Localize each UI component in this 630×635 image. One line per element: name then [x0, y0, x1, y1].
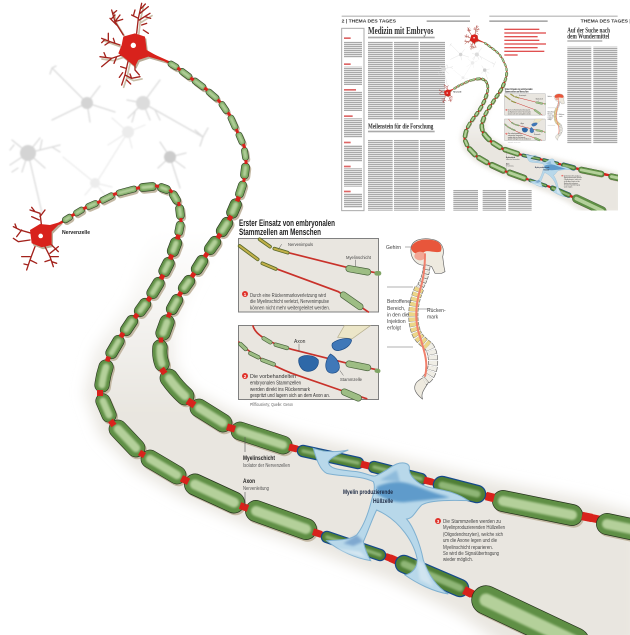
thumbnail left page: Meilenstein für die Forschung: [368, 121, 433, 130]
neuron: lower red cell: [13, 207, 63, 270]
spine and skull illustration: mark: [427, 314, 439, 320]
spine labels: Gehirn: [386, 245, 401, 251]
myelin-producing glial cell: [313, 448, 468, 594]
spine and skull illustration: Bereich,: [387, 306, 405, 312]
badge 3: 3: [437, 519, 440, 524]
graphic title: Stammzellen am Menschen: [239, 226, 321, 237]
skull: [411, 239, 445, 273]
lower axon: [52, 186, 480, 597]
shaded band behind axons: [85, 185, 630, 635]
label: Myelin producing cell: [343, 489, 393, 505]
spine and skull illustration: Betroffener: [387, 299, 412, 305]
label: Axon: [243, 479, 269, 506]
graphic title: [239, 217, 335, 237]
panel 1 labels: Nervenimpuls: [288, 242, 314, 248]
label: Axon: Axon: [243, 479, 255, 485]
label: Axon: Nervenleitung: [243, 486, 269, 492]
label: Myelin producing cell: Myelin produzierende: [343, 489, 393, 496]
panel 2 text: werden direkt ins Rückenmark: [250, 387, 310, 393]
thumbnail right page text: dem Wundermittel: [567, 31, 609, 40]
step 3 text: Myelinschicht reparieren.: [443, 545, 493, 551]
panel 1 text: [242, 291, 330, 312]
panel 2 axons, cells and syringe: [239, 326, 378, 399]
step 3 text: So wird die Signalübertragung: [443, 551, 499, 557]
thumbnail left page: [342, 16, 630, 211]
thumbnail left page: 2 | THEMA DES TAGES: [342, 19, 397, 25]
label: Nervenzelle: Nervenzelle: [62, 230, 90, 236]
panel 1 text: 1: [244, 292, 247, 297]
step 3 text: um die Axone legen und die: [443, 538, 497, 544]
panel 2 text: [242, 373, 330, 399]
panel 1 text: können nicht mehr weitergeleitet werden.: [250, 306, 330, 312]
panel 2: injection: [238, 326, 378, 400]
panel 2 text: 2: [244, 374, 247, 379]
panel 2 labels: Axon: [294, 339, 306, 345]
thumbnail right page text: [504, 25, 617, 143]
thumbnail left page: Medizin mit Embryos: [368, 26, 433, 37]
panel 2 text: gespritzt und lagern sich an dem Axon an.: [250, 393, 330, 399]
panel 1: injury: [238, 238, 379, 312]
spine and skull illustration: [386, 239, 446, 399]
step 3 text: wieder möglich.: [443, 557, 473, 563]
panel 1 axons: [240, 239, 379, 312]
spinal cord: [416, 253, 426, 377]
upper axon: [150, 54, 630, 526]
thumbnail right page text: Auf der Suche nach: [567, 25, 610, 34]
newspaper page thumbnail: [342, 16, 630, 213]
panel 2 text: Die vorbehandelten: [250, 374, 296, 380]
step 3 text: Myelinproduzierenden Hüllzellen: [443, 525, 505, 531]
panel 1: injury: Myelinschicht: [346, 255, 372, 261]
spine and skull illustration: Rücken-: [427, 308, 446, 314]
spine and skull illustration: in den die: [387, 312, 409, 318]
sacrum: [415, 377, 430, 399]
label: Myelin producing cell: Hüllzelle: [373, 498, 393, 505]
label: Myelinschicht: Isolator der Nervenzellen: [243, 463, 290, 469]
vertebrae: [419, 267, 427, 288]
panel 2 text: embryonalen Stammzellen: [250, 380, 301, 386]
panel 2: injection: Stammzelle: [340, 377, 362, 383]
label: Myelinschicht: [243, 437, 290, 469]
panel 1 text: die Myelinschicht verletzt, Nervenimpulse: [250, 299, 329, 305]
nucleus: [38, 234, 43, 238]
step 3 text: (Oligodendrozyten), welche sich: [443, 532, 503, 538]
panel 1 text: Durch eine Rückenmarksverletzung wird: [250, 293, 326, 299]
leader lines: [387, 247, 431, 347]
spine and skull illustration: Injektion: [387, 319, 406, 325]
credit line: Pfifficus/erty; Quelle: Geron: [250, 402, 293, 407]
nucleus: [131, 43, 136, 48]
ghost neurons: [10, 66, 208, 213]
label: Myelinschicht: Myelinschicht: [243, 456, 275, 462]
graphic title: Erster Einsatz von embryonalen: [239, 217, 335, 228]
thumbnail miniature of the main graphic: [438, 26, 621, 213]
red nodes of Ranvier: [71, 68, 592, 594]
brain: [411, 239, 442, 254]
neuron: upper red cell: [100, 3, 170, 87]
spine and skull illustration: erfolgt: [387, 326, 402, 332]
step 3 text: Die Stammzellen werden zu: [443, 519, 501, 525]
step 3 text: [435, 518, 505, 563]
